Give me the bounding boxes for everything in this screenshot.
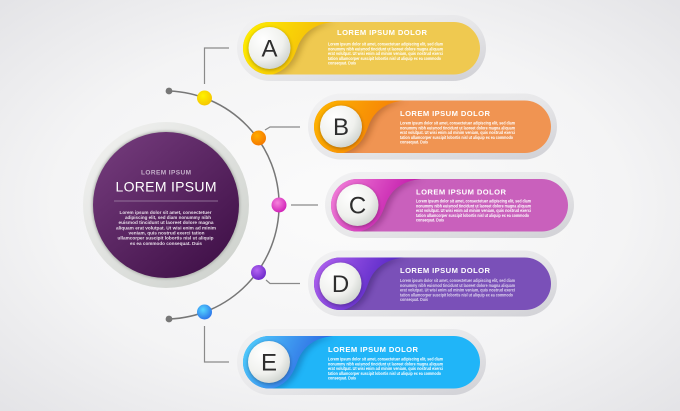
panel: B (308, 94, 557, 160)
body text A: Lorem ipsum dolor sit amet, consectetuer adipiscing elit, sed diam (328, 42, 443, 46)
panel: central circle (83, 122, 249, 288)
badge C (336, 184, 379, 228)
body text D: Lorem ipsum dolor sit amet, consectetuer adipiscing elit, sed diam (400, 278, 515, 283)
body text E: Lorem ipsum dolor sit amet, consectetuer adipiscing elit, sed diam (328, 356, 443, 362)
body text A: erat volutpat. Ut wisi enim ad minim veniam, quis nostrud exerci (328, 51, 443, 56)
body text A: consequat. Duis (328, 61, 357, 66)
body text D: erat volutpat. Ut wisi enim ad minim veniam, quis nostrud exerci (400, 288, 515, 293)
body text E: tation ullamcorper suscipit lobortis nisl ut aliquip ex ea commodo (328, 371, 441, 376)
badge A (248, 27, 291, 70)
body text A (328, 42, 443, 66)
node: purple (251, 265, 266, 280)
badge D: D (332, 271, 349, 298)
body text C: tation ullamcorper suscipit lobortis nisl ut aliquip ex ea commodo (416, 213, 529, 218)
badge E (248, 341, 290, 384)
body text E: consequat. Duis (328, 376, 357, 381)
body text B: nonummy nibh euismod tincidunt ut laoreet dolore magna aliquam (400, 125, 515, 130)
body text E: nonummy nibh euismod tincidunt ut laoreet dolore magna aliquam (328, 361, 443, 366)
body text A: nonummy nibh euismod tincidunt ut laoreet dolore magna aliquam (328, 46, 443, 51)
central body text: veniam, quis nostrud exerci tation (128, 230, 205, 236)
body text B: tation ullamcorper suscipit lobortis nisl ut aliquip ex ea commodo (400, 135, 513, 140)
central body text: adipiscing elit, sed diam nonummy nibh (125, 215, 211, 220)
node: blue (197, 304, 212, 320)
heading E: LOREM IPSUM DOLOR (328, 345, 419, 354)
badge E: E (261, 350, 277, 376)
heading A: LOREM IPSUM DOLOR (337, 28, 428, 37)
connector lines (204, 48, 318, 362)
central body text: ullamcorper suscipit lobortis nisl ut aliquip (118, 236, 214, 241)
body text B: Lorem ipsum dolor sit amet, consectetuer adipiscing elit, sed diam (400, 120, 515, 126)
node: yellow (197, 90, 212, 106)
body text B: consequat. Duis (400, 140, 429, 145)
panel: A (237, 15, 486, 81)
body text D: tation ullamcorper suscipit lobortis nisl ut aliquip ex ea commodo (400, 292, 513, 297)
body text B: erat volutpat. Ut wisi enim ad minim veniam, quis nostrud exerci (400, 130, 515, 135)
heading B: LOREM IPSUM DOLOR (400, 109, 491, 118)
central body text: ex ea commodo consequat. Duis (130, 241, 203, 246)
central main heading: LOREM IPSUM (116, 179, 216, 195)
heading D: LOREM IPSUM DOLOR (400, 266, 491, 275)
central body text: aliquam erat volutpat. Ut wisi enim ad minim (116, 225, 216, 230)
body text A: tation ullamcorper suscipit lobortis nisl ut aliquip ex ea commodo (328, 56, 441, 61)
arc end dot: top (166, 88, 172, 94)
body text D: consequat. Duis (400, 297, 429, 302)
central body text (114, 201, 218, 246)
body text C (416, 198, 531, 223)
heading C: LOREM IPSUM DOLOR (416, 188, 507, 196)
body text C: nonummy nibh euismod tincidunt ut laoreet dolore magna aliquam (416, 203, 531, 208)
node: pink (272, 198, 286, 212)
panel: C (325, 172, 574, 238)
central body text: Lorem ipsum dolor sit amet, consectetuer (120, 210, 212, 215)
body text B (400, 120, 515, 145)
body text D: nonummy nibh euismod tincidunt ut laoreet dolore magna aliquam (400, 283, 515, 288)
badge B (320, 106, 362, 149)
badge D (319, 262, 362, 306)
body text C: Lorem ipsum dolor sit amet, consectetuer adipiscing elit, sed diam (416, 198, 531, 204)
panel: E (237, 329, 486, 395)
panel: D (308, 250, 557, 316)
body text C: consequat. Duis (416, 218, 445, 223)
central body text: euismod tincidunt ut laoreet dolore magna (118, 220, 214, 225)
badge C: C (349, 192, 366, 220)
central small heading: LOREM IPSUM (141, 170, 191, 176)
badge B: B (333, 114, 349, 141)
body text D (400, 278, 515, 302)
arc end dot: bottom (166, 316, 172, 322)
arc connecting the nodes (169, 91, 279, 319)
body text E (328, 356, 443, 381)
node: orange (251, 130, 266, 146)
badge A: A (261, 36, 278, 62)
body text C: erat volutpat. Ut wisi enim ad minim veniam, quis nostrud exerci (416, 208, 531, 213)
body text E: erat volutpat. Ut wisi enim ad minim veniam, quis nostrud exerci (328, 366, 443, 371)
